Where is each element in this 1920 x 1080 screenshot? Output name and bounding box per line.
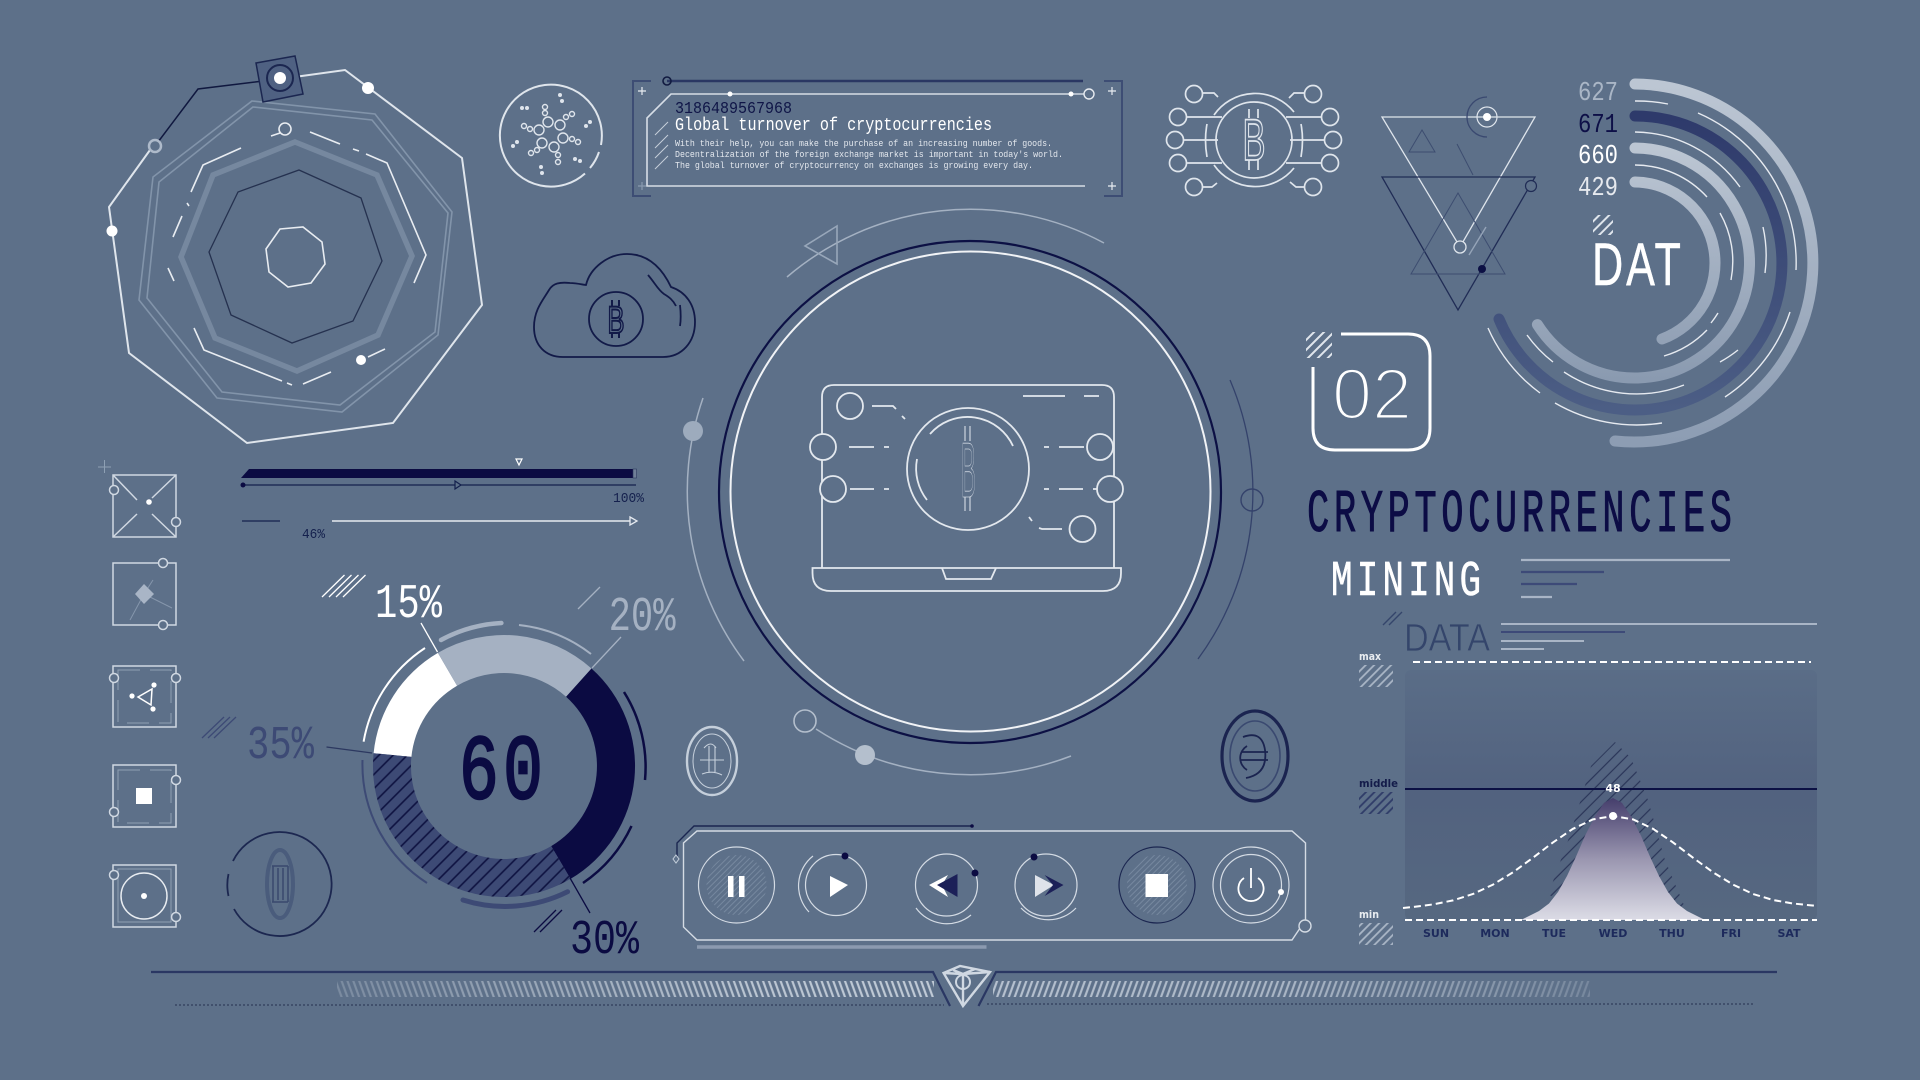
icon: diamond logo — [944, 966, 990, 1006]
arc values: 627 — [1578, 79, 1618, 109]
label 30%: 30% — [570, 914, 639, 968]
hatch mark — [1593, 215, 1613, 235]
segment 30 percent navy — [551, 668, 635, 879]
bottom bar and node — [697, 920, 1311, 947]
legend labels: max — [1359, 650, 1381, 663]
arc values — [1578, 79, 1618, 204]
progress bars — [240, 459, 645, 543]
panel: media control bar — [673, 824, 1311, 947]
icon: coin in ring — [227, 832, 332, 936]
arc values: 429 — [1578, 174, 1618, 204]
arc values: 660 — [1578, 142, 1618, 172]
double ring — [719, 241, 1221, 743]
plot area — [1405, 670, 1817, 920]
icon box 5 — [110, 865, 180, 927]
data heading: DATA — [1404, 617, 1490, 660]
hatched peak shadow — [1550, 742, 1684, 906]
panel: concentric polygon radar — [106, 56, 482, 443]
button forward — [1015, 854, 1077, 920]
46% label: 46% — [302, 527, 326, 543]
small center octagon — [266, 227, 325, 287]
legend labels: middle — [1359, 777, 1398, 790]
label 20%: 20% — [609, 591, 676, 645]
upper bar — [240, 459, 636, 489]
broken white octagon segments — [168, 132, 426, 385]
double grey octagon — [139, 101, 452, 412]
icon: bitcoin cloud: B — [608, 300, 624, 342]
legend hatches — [1359, 665, 1393, 945]
chart: concentric data arcs — [1488, 79, 1813, 442]
chart: donut 60 — [202, 575, 676, 968]
top accent line — [673, 824, 974, 863]
icon: overlapping triangles — [1382, 97, 1536, 310]
button play — [799, 852, 866, 916]
icon: bitcoin network — [1166, 86, 1342, 196]
lower bar — [242, 517, 637, 525]
dashed curve — [1403, 816, 1817, 908]
weekday labels: SAT — [1777, 927, 1801, 940]
segment 35 percent hatched — [373, 753, 570, 897]
panel: left icon column — [98, 460, 180, 927]
badge: 02 — [1306, 332, 1430, 450]
panel: weekly data chart — [1359, 612, 1817, 945]
weekday labels: TUE — [1542, 927, 1566, 940]
legend labels — [1359, 650, 1398, 921]
serial number: 3186489567968 — [675, 100, 792, 119]
weekday labels: FRI — [1721, 927, 1741, 940]
badge: 02: 02 — [1332, 355, 1412, 435]
weekday labels: THU — [1659, 927, 1685, 940]
100% label: 100% — [613, 491, 645, 507]
button stop — [1119, 847, 1195, 923]
weekday labels — [1423, 927, 1801, 940]
icon box 4 — [110, 765, 180, 827]
bell area — [1521, 798, 1705, 920]
icon: network circle — [500, 85, 602, 187]
thick octagon — [181, 142, 412, 371]
icon: dark coin — [1222, 711, 1288, 801]
dark rule — [151, 972, 1777, 1006]
icon box 2 — [113, 558, 176, 630]
icon box 1 — [98, 460, 180, 537]
label 35%: 35% — [247, 720, 315, 773]
footer divider — [151, 966, 1777, 1006]
title: cryptocurrencies: CRYPTOCURRENCIES — [1307, 481, 1737, 549]
thick arcs — [1499, 84, 1813, 442]
label 15%: 15% — [375, 578, 442, 632]
reference lines — [1405, 662, 1817, 920]
icon box 3 — [110, 666, 180, 727]
frame — [684, 831, 1306, 940]
icon: small light coin — [687, 727, 737, 795]
icon: bitcoin network: B — [1242, 108, 1266, 173]
weekday labels: MON — [1480, 927, 1510, 940]
panel: global turnover text box — [633, 77, 1122, 196]
weekday labels: WED — [1599, 927, 1627, 940]
segment 15 percent white — [374, 653, 457, 757]
laptop: B — [961, 426, 976, 514]
body text: Decentralization of the foreign exchange market is important in today's world. — [675, 149, 1063, 160]
subtitle bars — [1521, 560, 1730, 597]
infographic canvas — [98, 55, 1818, 1008]
thin surrounding arcs — [362, 623, 646, 906]
outer polygon outline — [109, 70, 482, 443]
panel: central laptop emblem — [683, 209, 1263, 775]
ring node left — [149, 140, 161, 152]
thin arcs — [1488, 101, 1796, 425]
icon: bitcoin cloud — [534, 254, 695, 357]
center value: 60 — [459, 722, 547, 827]
body text: With their help, you can make the purchase of an increasing number of goods. — [675, 138, 1052, 149]
DAT label: DAT — [1592, 232, 1684, 299]
button pause — [698, 847, 774, 923]
laptop — [810, 385, 1123, 591]
peak marker — [1605, 782, 1621, 820]
white dots — [106, 82, 374, 365]
pointer lines and hatch marks — [202, 575, 621, 932]
dotted rules — [175, 1004, 1754, 1005]
subtitle: mining: MINING — [1331, 555, 1485, 611]
dark right arc — [1198, 380, 1253, 659]
outer faint arcs — [687, 209, 1104, 775]
hatched bands — [337, 981, 1590, 997]
weekday labels: SUN — [1423, 927, 1449, 940]
heading decoration — [1383, 612, 1817, 649]
frame lines — [633, 77, 1122, 196]
body text: The global turnover of cryptocurrency on exchanges is growing every day. — [675, 160, 1033, 171]
peak marker: 48 — [1605, 782, 1621, 795]
body text — [675, 138, 1063, 171]
square target node — [256, 56, 303, 102]
heading: Global turnover of cryptocurrencies — [675, 116, 992, 136]
button power — [1213, 847, 1289, 923]
button rewind — [916, 854, 978, 924]
arc nodes — [683, 421, 1263, 765]
triangle outline — [805, 226, 837, 264]
arc values: 671 — [1578, 111, 1618, 141]
small ring node — [279, 123, 291, 135]
dark octagon — [209, 170, 382, 343]
legend labels: min — [1359, 908, 1379, 921]
segment 20 percent grey — [438, 635, 592, 697]
